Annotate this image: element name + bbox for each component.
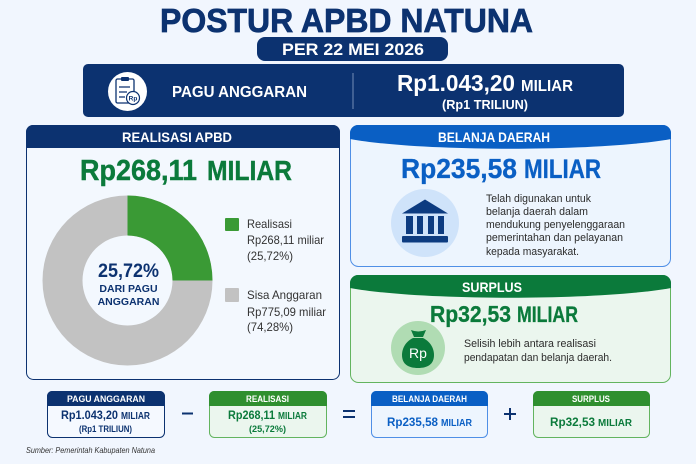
formula box: realisasi: (25,72%) [249,424,286,434]
formula box: realisasi: MILIAR [278,411,308,422]
formula box: realisasi: Rp268,11 [228,408,275,422]
formula box: pagu anggaran: Rp1.043,20 [61,408,118,422]
legend: realisasi [225,217,324,263]
legend: sisa anggaran [225,288,326,334]
banner label: PAGU ANGGARAN [172,84,307,101]
panel heading: REALISASI APBD [122,129,232,145]
realisasi value: Rp268,11 [80,155,197,187]
legend: sisa anggaran: Rp775,09 miliar [247,305,326,319]
surplus description: Selisih lebih antara realisasi [464,338,596,350]
panel heading: BELANJA DAERAH [438,129,550,145]
belanja description: kepada masyarakat. [486,246,579,258]
donut centre label: ANGGARAN [98,296,159,308]
belanja description: belanja daerah dalam [486,206,588,218]
donut chart [42,196,212,366]
belanja value: Rp235,58 [401,153,517,184]
legend: sisa anggaran: Sisa Anggaran [247,288,322,302]
legend: realisasi: Realisasi [247,217,292,231]
belanja description [486,193,625,258]
formula box: pagu anggaran: PAGU ANGGARAN [67,394,145,405]
date pill [257,37,448,61]
banner: pagu anggaran [83,64,624,117]
operator: minus [182,412,193,414]
donut centre label: DARI PAGU [99,283,158,295]
formula box: belanja daerah: MILIAR [441,418,473,429]
surplus value: Rp32,53 [430,301,511,327]
operator: equals [343,410,355,418]
donut centre label [98,261,159,308]
formula box: belanja daerah: Rp235,58 [387,415,438,429]
source note: Sumber: Pemerintah Kabupaten Natuna [26,445,155,455]
banner value: MILIAR [521,78,573,95]
surplus value: MILIAR [517,302,578,327]
icon: money bag [391,321,445,375]
legend: realisasi: Rp268,11 miliar [247,233,324,247]
formula box: pagu anggaran: MILIAR [121,411,151,422]
panel: realisasi APBD [26,125,340,380]
surplus value [430,301,578,327]
formula box: surplus: Rp32,53 [550,415,595,429]
formula box: surplus: MILIAR [598,418,633,429]
belanja value: MILIAR [524,154,601,184]
icon: government building [391,189,459,257]
formula box: pagu anggaran [47,391,165,438]
surplus description: pendapatan dan belanja daerah. [464,352,612,364]
banner value [397,70,573,112]
formula box: realisasi: REALISASI [246,394,289,405]
formula box: belanja daerah: BELANJA DAERAH [392,394,467,405]
legend: realisasi: (25,72%) [247,249,293,263]
panel: surplus [350,275,671,382]
icon: clipboard budget [108,72,147,111]
operator: plus [504,408,516,420]
belanja description: Telah digunakan untuk [486,193,591,205]
legend: sisa anggaran: (74,28%) [247,320,293,334]
belanja value [401,153,601,184]
belanja description: mendukung penyelenggaraan [486,219,625,231]
banner value: (Rp1 TRILIUN) [442,97,528,112]
formula box: surplus: SURPLUS [572,394,610,405]
belanja description: pemerintahan dan pelayanan [486,232,623,244]
date pill: PER 22 MEI 2026 [282,40,424,59]
formula box: surplus [533,391,650,438]
panel: belanja daerah [350,125,671,266]
icon: clipboard budget: Rp [129,96,137,102]
title: POSTUR APBD NATUNA [160,3,533,40]
formula box: realisasi [209,391,327,438]
realisasi value [80,155,292,187]
formula box: belanja daerah [371,391,488,438]
icon: money bag: Rp [409,345,427,361]
donut centre label: 25,72% [98,261,159,282]
surplus description [464,338,612,364]
realisasi value: MILIAR [207,155,292,186]
formula box: pagu anggaran: (Rp1 TRILIUN) [79,424,132,434]
banner value: Rp1.043,20 [397,70,515,96]
panel heading: SURPLUS [462,279,522,295]
